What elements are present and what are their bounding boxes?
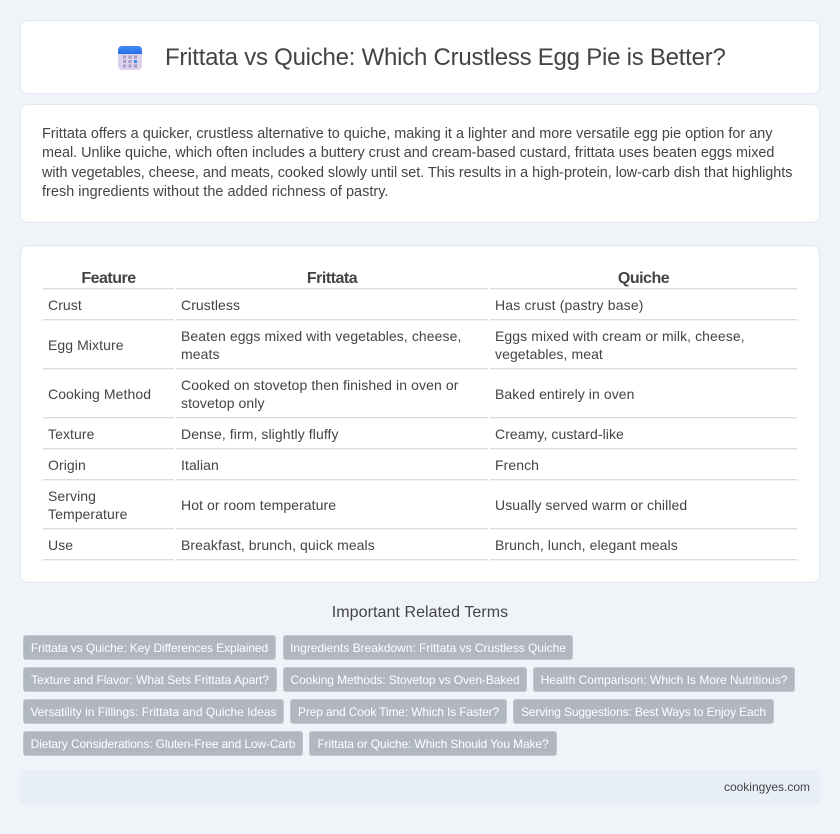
row: origin: Origin [48,457,86,473]
row: origin: Italian [181,457,219,473]
row: origin: French [495,457,539,473]
chip: Cooking Methods: Stovetop vs Oven-Baked [291,673,519,687]
row: crust: Crustless [181,297,240,313]
chip [23,667,277,692]
table header [81,270,670,287]
chip: Dietary Considerations: Gluten-Free and Low-Carb [31,737,295,751]
chip [23,635,276,660]
chip: Versatility in Fillings: Frittata and Quiche Ideas [30,705,277,719]
text block: introduction: Frittata offers a quicker, crustless alternative to quiche, making it a lighter and more versatile egg pie option for any [42,126,772,142]
chip [283,635,573,660]
text block: introduction: fresh ingredients without the added richness of pastry. [42,184,388,200]
text block: introduction: with vegetables, cheese, and meats, cooked slowly until set. This results in a high-protein, low-carb dish that highlights [42,165,792,181]
chip [23,699,284,724]
row: origin [43,448,797,473]
row: cooking method: Cooking Method [48,386,151,402]
icon: calendar [118,46,142,70]
row: serving temperature: Temperature [48,506,127,522]
row: texture: Creamy, custard-like [495,426,624,442]
row: egg mixture [43,319,797,362]
row: serving temperature: Usually served warm or chilled [495,497,687,513]
chip: Frittata vs Quiche: Key Differences Explained [31,641,268,655]
row: egg mixture: Eggs mixed with cream or milk, cheese, [495,328,745,344]
row: crust: Crust [48,297,82,313]
row: use: Brunch, lunch, elegant meals [495,537,678,553]
row: use [43,528,797,561]
panel: introduction [20,104,820,223]
panel: related terms chips [23,635,795,756]
chip [23,731,303,756]
chip: Health Comparison: Which Is More Nutritious? [541,673,787,687]
panel: comparison table [20,245,820,583]
chip: Frittata or Quiche: Which Should You Make? [317,737,549,751]
chip: Texture and Flavor: What Sets Frittata Apart? [31,673,269,687]
text block: introduction: meal. Unlike quiche, which often includes a buttery crust and cream-based custard, frittata uses beaten eggs mixed [42,145,774,161]
row: use: Use [48,537,73,553]
footer source text: cookingyes.com [724,780,810,794]
row: cooking method [43,368,797,411]
heading: important related terms: Important Related Terms [332,604,508,621]
chip [309,731,557,756]
row: serving temperature: Hot or room temperature [181,497,336,513]
row: egg mixture: vegetables, meat [495,346,603,362]
footer [20,770,820,804]
table header: Feature [81,270,136,287]
panel: title card [20,20,820,94]
row: texture: Texture [48,426,94,442]
chip: Ingredients Breakdown: Frittata vs Crustless Quiche [290,641,566,655]
table header: Quiche [618,270,669,287]
row: texture [43,417,797,442]
chip [290,699,507,724]
row: texture: Dense, firm, slightly fluffy [181,426,339,442]
row: crust: Has crust (pastry base) [495,297,644,313]
row: serving temperature [43,479,797,522]
row: egg mixture: meats [181,346,220,362]
chip [533,667,795,692]
table header: Frittata [307,270,357,287]
chip [283,667,527,692]
row: cooking method: Cooked on stovetop then finished in oven or [181,377,458,393]
row: serving temperature: Serving [48,488,96,504]
row: egg mixture: Beaten eggs mixed with vegetables, cheese, [181,328,461,344]
row: egg mixture: Egg Mixture [48,337,124,353]
row: cooking method: Baked entirely in oven [495,386,635,402]
row: use: Breakfast, brunch, quick meals [181,537,375,553]
row: crust [43,288,797,313]
chip [513,699,774,724]
chip: Serving Suggestions: Best Ways to Enjoy Each [521,705,766,719]
title: Frittata vs Quiche: Which Crustless Egg Pie is Better? [165,44,726,71]
row: cooking method: stovetop only [181,395,265,411]
text block: introduction [42,126,792,200]
chip: Prep and Cook Time: Which Is Faster? [298,705,499,719]
